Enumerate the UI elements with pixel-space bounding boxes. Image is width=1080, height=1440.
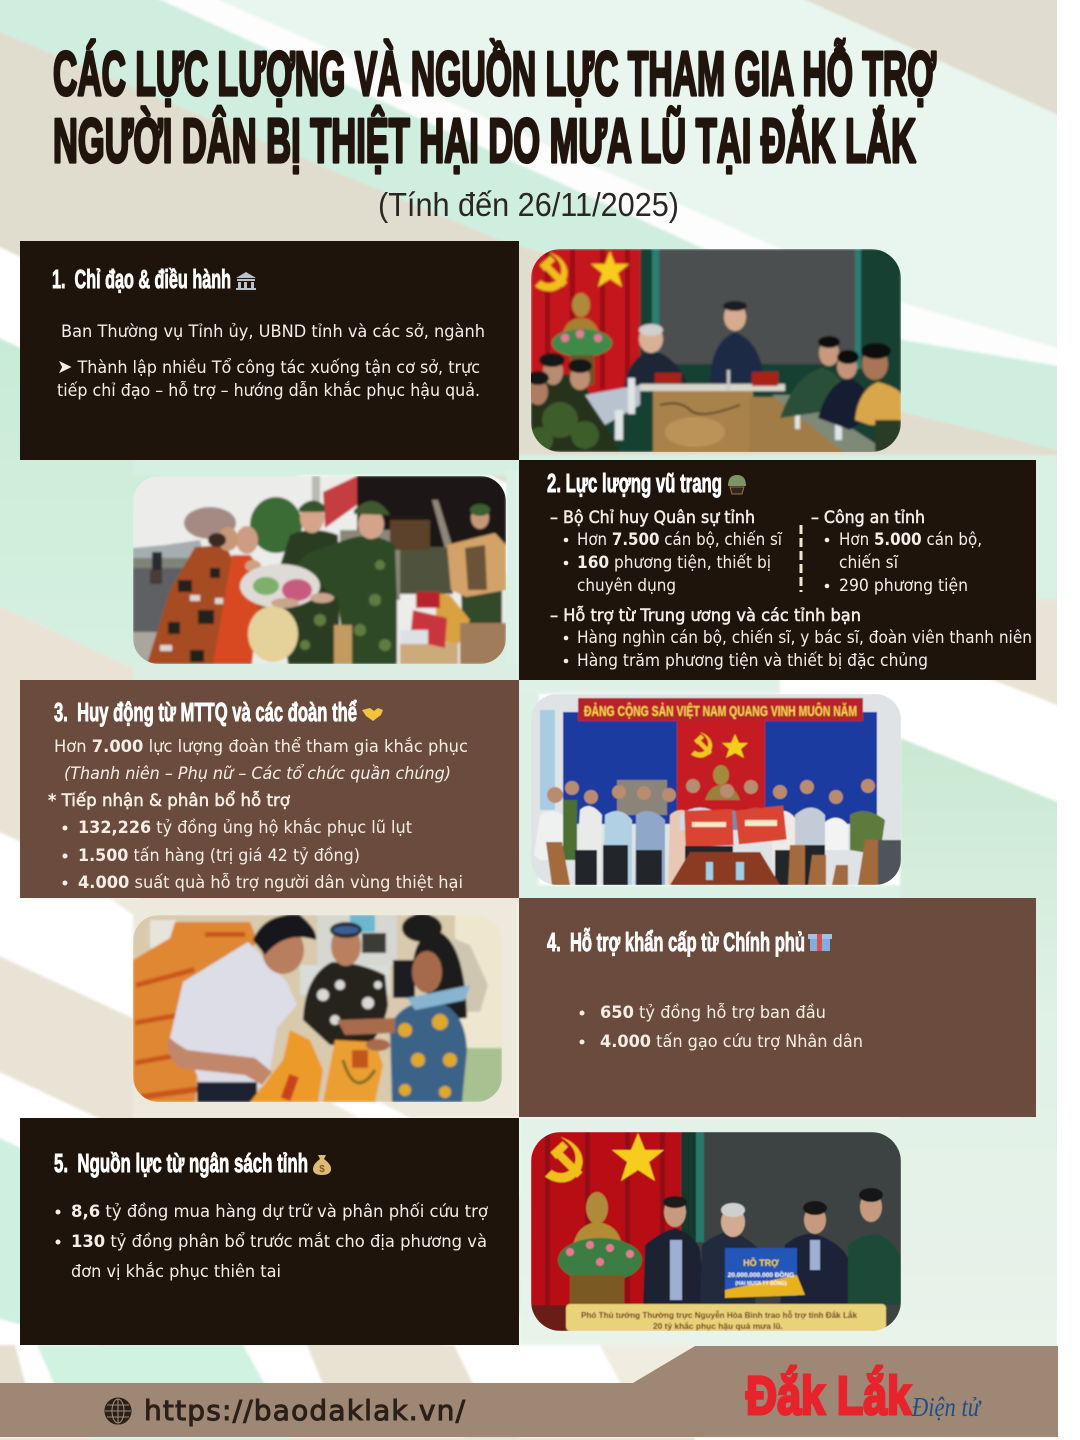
panel 4: hỗ trợ khẩn cấp từ Chính phủ bbox=[519, 898, 1036, 1117]
body text 3: 1.500 tấn hàng (trị giá 42 tỷ đồng) bbox=[78, 846, 360, 865]
body text 1: ➤ Thành lập nhiều Tổ công tác xuống tận cơ sở, trực bbox=[57, 356, 480, 378]
website url: https://baodaklak.vn/ bbox=[144, 1394, 466, 1427]
column: công an: – Công an tỉnh bbox=[811, 508, 925, 527]
caption strip: 20 tỷ khắc phục hậu quả mưa lũ. bbox=[653, 1320, 783, 1331]
list: hỗ trợ từ trung ương: Hàng trăm phương tiện và thiết bị đặc chủng bbox=[577, 651, 928, 670]
icon: money bag bbox=[313, 1155, 331, 1175]
list: hỗ trợ từ trung ương: – Hỗ trợ từ Trung ương và các tỉnh bạn bbox=[550, 606, 861, 625]
photo 5: handing over support board: HỖ TRỢ bbox=[743, 1257, 779, 1268]
column: quân sự: – Bộ Chỉ huy Quân sự tỉnh bbox=[550, 508, 755, 527]
panel 5: ngân sách tỉnh bbox=[20, 1118, 519, 1345]
title bbox=[53, 40, 936, 176]
icon: money bag: $ bbox=[319, 1164, 325, 1175]
body text 3: * Tiếp nhận & phân bổ hỗ trợ bbox=[48, 791, 290, 810]
footer bar bbox=[0, 1346, 1058, 1437]
column: công an: 290 phương tiện bbox=[839, 576, 968, 595]
column: quân sự: chuyên dụng bbox=[577, 576, 676, 595]
body text 1: Ban Thường vụ Tỉnh ủy, UBND tỉnh và các sở, ngành bbox=[61, 322, 485, 341]
photo 3: group photo: ĐẢNG CỘNG SẢN VIỆT NAM QUANG VINH MUÔN NĂM bbox=[584, 702, 857, 720]
photo 1: meeting bbox=[527, 249, 901, 453]
body text 1: tiếp chỉ đạo – hỗ trợ – hướng dẫn khắc phục hậu quả. bbox=[57, 381, 480, 400]
body text 5: đơn vị khắc phục thiên tai bbox=[71, 1262, 281, 1281]
body text 3 bbox=[48, 737, 468, 892]
column: quân sự bbox=[550, 508, 782, 595]
heading 1: 1. Chỉ đạo & điều hành bbox=[52, 266, 231, 294]
icon: handshake bbox=[362, 708, 383, 721]
subtitle: date: (Tính đến 26/11/2025) bbox=[378, 186, 679, 223]
photo 5: handing over support board: (HAI MƯƠI TỶ ĐỒNG) bbox=[735, 1280, 787, 1287]
list: hỗ trợ từ trung ương: Hàng nghìn cán bộ, chiến sĩ, y bác sĩ, đoàn viên thanh niên bbox=[577, 628, 1032, 647]
heading 4: 4. Hỗ trợ khẩn cấp từ Chính phủ bbox=[547, 927, 805, 957]
column: quân sự: Hơn 7.500 cán bộ, chiến sĩ bbox=[577, 530, 782, 549]
heading 5: 5. Nguồn lực từ ngân sách tỉnh bbox=[54, 1150, 308, 1178]
photo 4: rice distribution bbox=[133, 914, 502, 1102]
column: công an bbox=[811, 508, 982, 595]
body text 3: 132,226 tỷ đồng ủng hộ khắc phục lũ lụt bbox=[78, 818, 413, 837]
logo: Đắk Lắk Điện tử: Điện tử bbox=[911, 1392, 982, 1422]
body text 4 bbox=[580, 1003, 863, 1051]
body text 3: (Thanh niên – Phụ nữ – Các tổ chức quần chúng) bbox=[64, 764, 451, 783]
photo 5: handing over support board bbox=[531, 1132, 901, 1331]
body text 5: 8,6 tỷ đồng mua hàng dự trữ và phân phối cứu trợ bbox=[71, 1202, 488, 1221]
heading 2: 2. Lực lượng vũ trang bbox=[547, 470, 722, 498]
icon: helmet bbox=[728, 475, 746, 494]
photo 3: group photo bbox=[531, 694, 901, 885]
body text 5: 130 tỷ đồng phân bổ trước mắt cho địa phương và bbox=[71, 1232, 487, 1251]
column: công an: Hơn 5.000 cán bộ, bbox=[839, 530, 982, 549]
panel 2: lực lượng vũ trang bbox=[519, 460, 1036, 680]
icon: government building bbox=[236, 272, 256, 290]
panel 1: chỉ đạo và điều hành bbox=[20, 241, 519, 460]
body text 4: 4.000 tấn gạo cứu trợ Nhân dân bbox=[600, 1032, 863, 1051]
column: quân sự: 160 phương tiện, thiết bị bbox=[577, 553, 771, 572]
body text 3: Hơn 7.000 lực lượng đoàn thể tham gia khắc phục bbox=[54, 737, 468, 756]
list: hỗ trợ từ trung ương bbox=[550, 606, 1032, 670]
icon: globe bbox=[105, 1398, 131, 1424]
body text 4: 650 tỷ đồng hỗ trợ ban đầu bbox=[600, 1003, 826, 1022]
column: công an: chiến sĩ bbox=[839, 553, 898, 572]
heading 3: 3. Huy động từ MTTQ và các đoàn thể bbox=[54, 699, 357, 727]
photo 2: soldiers giving aid bbox=[133, 476, 506, 664]
body text 1 bbox=[57, 322, 485, 400]
icon: gift bbox=[808, 934, 832, 951]
logo: Đắk Lắk Điện tử: Đắk Lắk bbox=[746, 1366, 912, 1426]
photo 5: handing over support board: 20.000.000.000 ĐỒNG bbox=[728, 1269, 794, 1279]
body text 5 bbox=[56, 1202, 488, 1281]
body text 3: 4.000 suất quà hỗ trợ người dân vùng thiệt hại bbox=[78, 873, 463, 892]
caption strip: Phó Thủ tướng Thường trực Nguyễn Hòa Bình trao hỗ trợ tỉnh Đắk Lắk bbox=[581, 1309, 857, 1320]
panel 3: MTTQ và các đoàn thể bbox=[20, 680, 519, 898]
caption strip bbox=[566, 1304, 886, 1331]
